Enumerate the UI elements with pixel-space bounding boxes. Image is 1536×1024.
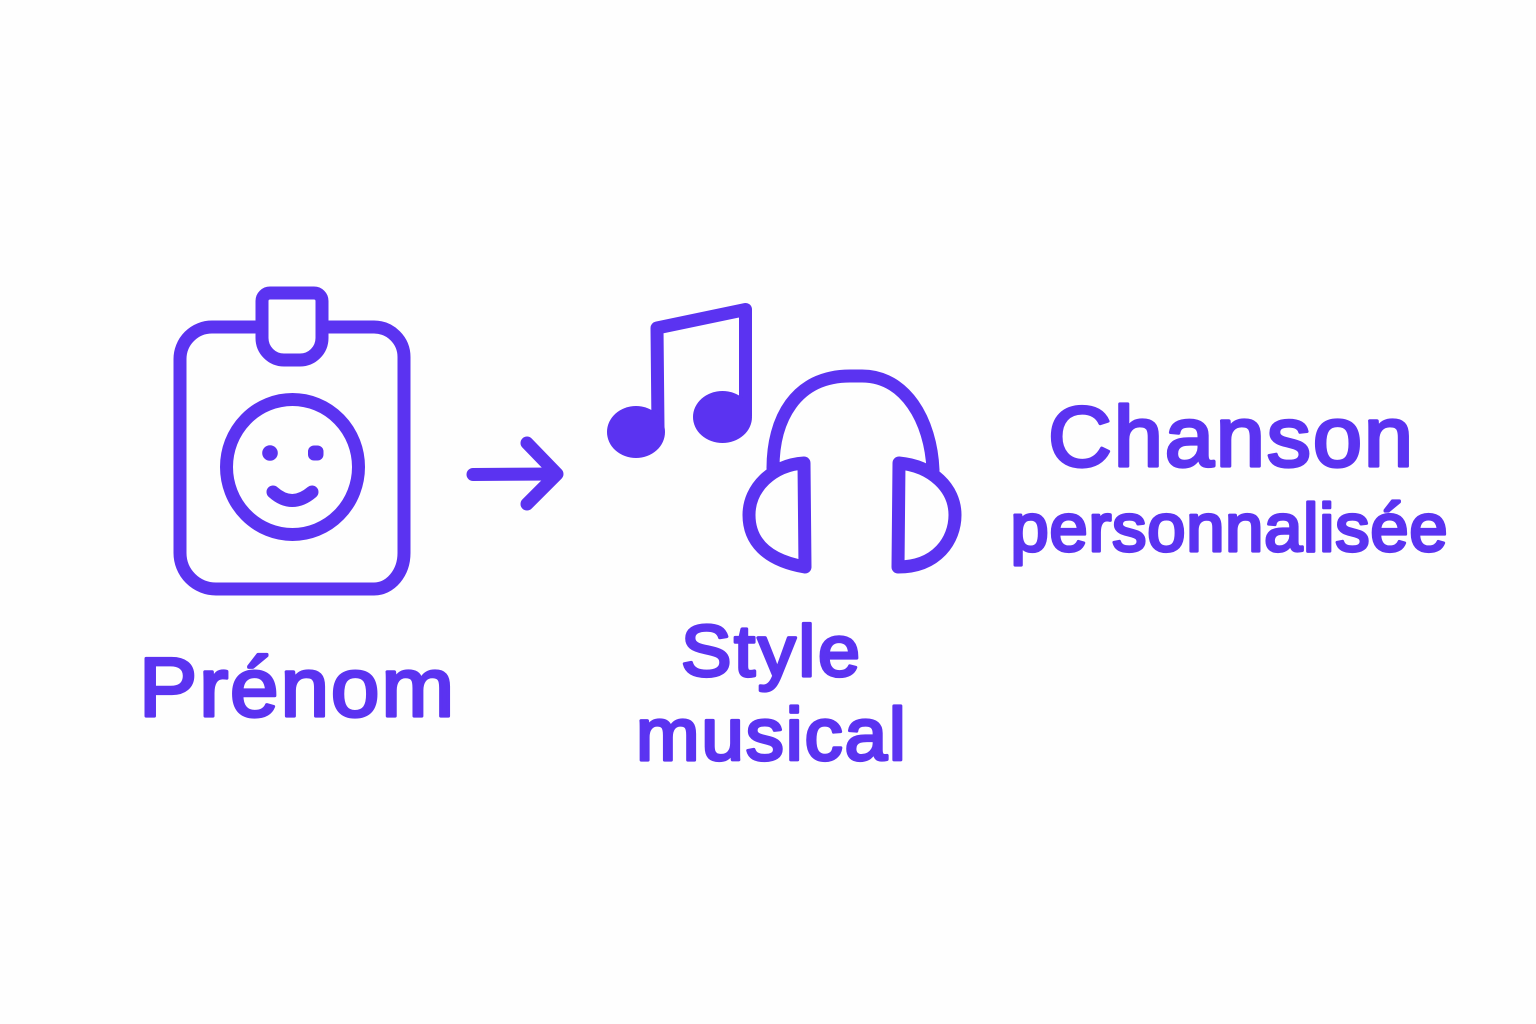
right ear cup [898,463,955,567]
label: Chanson personnalisée: Chanson [1048,391,1413,485]
label: Prénom: Prénom [139,641,454,735]
icon: name badge with smiley face [180,293,404,589]
headband [773,376,933,470]
label: Style musical [636,611,906,776]
right eye [308,446,324,460]
smile [273,492,312,500]
label: Style musical: Style [681,611,860,692]
note stems and beam [657,310,746,428]
label: Chanson personnalisée: personnalisée [1010,490,1448,566]
smiley face outline [226,400,358,534]
badge body [180,327,404,589]
left ear cup [749,463,805,567]
label: Style musical: musical [636,693,906,776]
badge clip [262,293,322,360]
left eye [262,445,278,461]
right note head [693,391,752,443]
icon: music note [607,310,752,458]
icon: headphones [749,376,955,567]
left note head [607,406,665,458]
label: Chanson personnalisée [1010,391,1448,566]
arrow [473,443,557,504]
